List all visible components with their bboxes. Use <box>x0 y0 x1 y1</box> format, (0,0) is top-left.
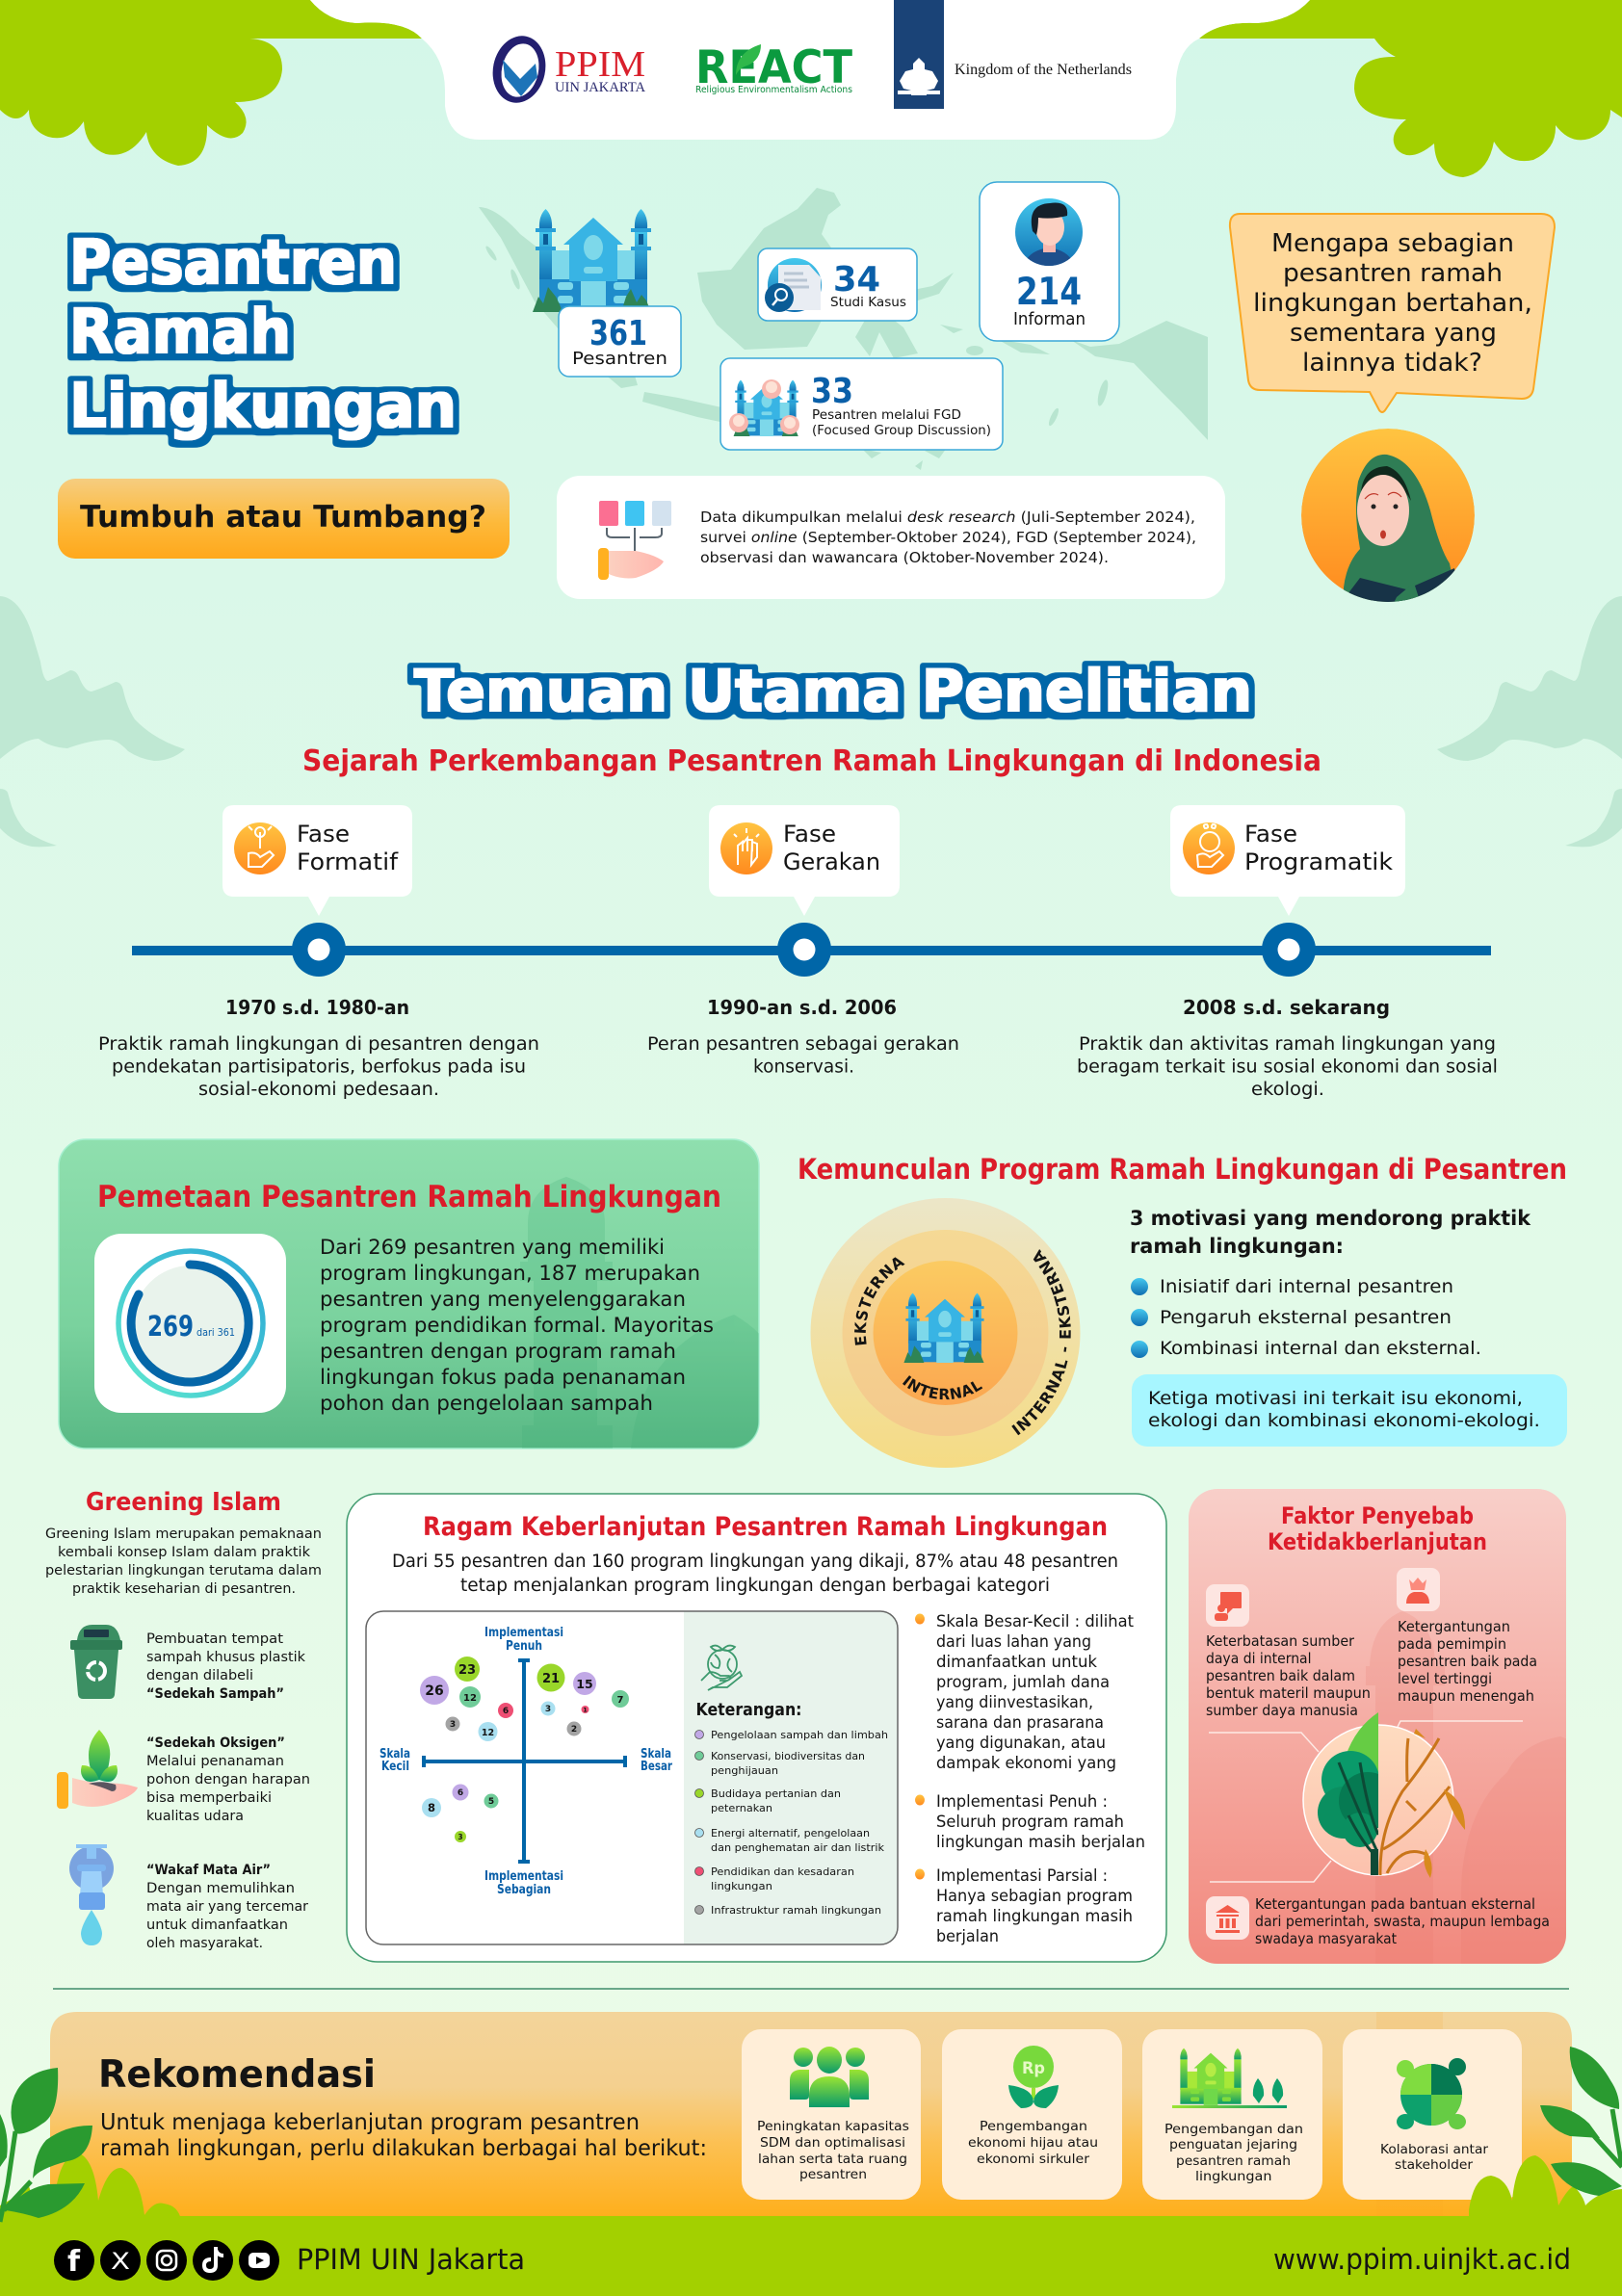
timeline phase 3: Praktik dan aktivitas ramah lingkungan yang <box>1079 1034 1496 1055</box>
scale definitions: yang diinvestasikan, <box>936 1693 1093 1711</box>
panel: Pemetaan Pesantren: program pendidikan formal. Mayoritas <box>320 1314 714 1337</box>
timeline phase 2: Peran pesantren sebagai gerakan <box>647 1034 959 1055</box>
icon: leader dependency <box>1397 1568 1440 1611</box>
concentric circles diagram: INTERNAL <box>903 1375 982 1400</box>
callout: speech bubble question: Mengapa sebagian <box>1271 229 1514 258</box>
panel: Greening Islam: pohon dengan harapan <box>146 1772 310 1787</box>
stat: 214 informan: 214 <box>1016 271 1082 314</box>
chart: quadrant bubble chart: 5 <box>488 1797 494 1807</box>
panel: Greening Islam: Greening Islam <box>86 1488 281 1517</box>
stat: 214 informan: Informan <box>1013 310 1086 329</box>
chart: quadrant bubble chart: 3 <box>450 1720 456 1730</box>
panel: Faktor Penyebab Ketidakberlanjutan: Faktor Penyebab <box>1281 1502 1474 1529</box>
panel: Pemetaan Pesantren: program lingkungan, 187 merupakan <box>320 1262 700 1285</box>
logo: PPIM UIN Jakarta: PPIM <box>555 44 645 85</box>
timeline phase 1: 1970 s.d. 1980-an <box>225 996 409 1019</box>
card: kapasitas SDM: SDM dan optimalisasi <box>760 2135 905 2151</box>
card: kapasitas SDM: pesantren <box>799 2167 867 2182</box>
panel: Greening Islam: “Sedekah Sampah” <box>146 1686 284 1702</box>
legend: peternakan <box>711 1803 772 1814</box>
panel: Faktor Penyebab Ketidakberlanjutan: pesantren baik pada <box>1398 1653 1537 1670</box>
panel: Faktor Penyebab Ketidakberlanjutan: maupun menengah <box>1398 1687 1534 1705</box>
card: jejaring pesantren: pesantren ramah <box>1176 2153 1291 2169</box>
stat: 34 studi kasus: 34 <box>833 260 880 300</box>
icon: external aid bank <box>1206 1896 1249 1940</box>
timeline phase 2 <box>647 805 959 1077</box>
chart: quadrant bubble chart: Besar <box>641 1760 672 1774</box>
timeline phase 2: konservasi. <box>753 1057 854 1077</box>
panel: Greening Islam: praktik keseharian di pesantren. <box>72 1581 296 1597</box>
motivation list <box>1131 1276 1481 1359</box>
scale definitions: Implementasi Penuh : <box>936 1792 1108 1811</box>
callout: three motivations <box>1132 1374 1567 1447</box>
progress ring tile <box>94 1234 286 1413</box>
chart: quadrant bubble chart: 7 <box>617 1695 624 1706</box>
callout: speech bubble question: sementara yang <box>1290 319 1497 348</box>
icon: hand with seedling <box>57 1730 138 1809</box>
footer band: PPIM UIN Jakarta <box>297 2243 525 2276</box>
timeline phase 3 <box>1077 805 1498 1100</box>
phase card <box>1170 805 1405 916</box>
section: Kemunculan Program: ramah lingkungan: <box>1130 1235 1344 1258</box>
panel: Greening Islam: Greening Islam merupakan pemaknaan <box>45 1526 322 1542</box>
progress ring tile: 269 <box>147 1310 194 1343</box>
stat: 33 pesantren FGD: Pesantren melalui FGD <box>812 408 961 423</box>
panel: Faktor Penyebab Ketidakberlanjutan: bentuk materil maupun <box>1206 1684 1371 1702</box>
heading: Temuan Utama Penelitian: Temuan Utama Penelitian <box>414 658 1252 725</box>
card: jejaring pesantren <box>1142 2029 1322 2200</box>
icon: people group <box>790 2047 869 2107</box>
panel: Greening Islam: “Sedekah Oksigen” <box>146 1735 285 1751</box>
chart: quadrant bubble chart: 12 <box>482 1728 494 1738</box>
icon: green mosque and trees <box>1172 2048 1287 2108</box>
plant leaves right <box>1540 2047 1622 2196</box>
title: Ramah <box>69 297 291 367</box>
chart: quadrant bubble chart: 2 <box>571 1725 577 1735</box>
tree foliage: top left <box>0 0 422 166</box>
chart: quadrant bubble chart: 15 <box>576 1677 593 1691</box>
section: Kemunculan Program <box>798 1153 1567 1468</box>
panel: Greening Islam: oleh masyarakat. <box>146 1936 263 1951</box>
scale definitions: dampak ekonomi yang <box>936 1754 1116 1772</box>
icon: rupiah flower <box>1008 2046 1059 2108</box>
chart: quadrant bubble chart: Implementasi <box>484 1869 563 1884</box>
logo: PPIM UIN Jakarta: UIN JAKARTA <box>555 80 645 95</box>
panel: Greening Islam: kualitas udara <box>146 1809 244 1824</box>
callout: speech bubble question: pesantren ramah <box>1283 259 1503 288</box>
header logo band <box>310 0 1310 140</box>
scale definitions <box>915 1612 1145 1945</box>
panel: Greening Islam: Melalui penanaman <box>146 1754 284 1769</box>
legend: Budidaya pertanian dan <box>711 1788 841 1800</box>
panel: Greening Islam: dengan dilabeli <box>146 1668 253 1683</box>
panel: Ragam Keberlanjutan: tetap menjalankan program lingkungan dengan berbagai kategori <box>460 1576 1050 1596</box>
logo: Kingdom of the Netherlands <box>894 0 1132 109</box>
icon: puzzle globe <box>1397 2058 1466 2129</box>
social icons: f <box>67 2245 81 2279</box>
icon: man avatar <box>1015 198 1083 266</box>
legend <box>695 1646 888 1917</box>
panel: Greening Islam: pelestarian lingkungan terutama dalam <box>45 1563 322 1578</box>
social icons <box>54 2240 279 2281</box>
panel: Faktor Penyebab Ketidakberlanjutan: swadaya masyarakat <box>1255 1930 1397 1947</box>
concentric circles diagram <box>811 1198 1081 1468</box>
stat: 33 pesantren FGD: 33 <box>811 372 853 411</box>
chart: quadrant bubble chart: Implementasi <box>484 1626 563 1640</box>
map of Indonesia <box>479 188 1208 470</box>
logo: Kingdom of the Netherlands: Kingdom of the Netherlands <box>955 62 1132 78</box>
timeline phase 3: 2008 s.d. sekarang <box>1183 996 1390 1019</box>
card: kapasitas SDM <box>742 2029 921 2200</box>
chart: quadrant bubble chart: Kecil <box>381 1760 409 1774</box>
scale definitions: Seluruh program ramah <box>936 1813 1124 1831</box>
stat: 34 studi kasus <box>758 248 917 321</box>
section: Kemunculan Program: 3 motivasi yang mendorong praktik <box>1130 1207 1531 1230</box>
panel: Greening Islam: sampah khusus plastik <box>146 1650 306 1665</box>
scale definitions: program, jumlah dana <box>936 1673 1110 1691</box>
timeline phase 1: pendekatan partisipatoris, berfokus pada isu <box>112 1057 526 1077</box>
chart: quadrant bubble chart: 21 <box>542 1672 560 1686</box>
stat: 33 pesantren FGD: (Focused Group Discussion) <box>812 424 991 438</box>
chart: quadrant bubble chart: 12 <box>463 1693 477 1704</box>
legend: Keterangan: <box>695 1700 801 1720</box>
panel: Ragam Keberlanjutan: Ragam Keberlanjutan Pesantren Ramah Lingkungan <box>423 1512 1108 1542</box>
phase card: Fase <box>297 821 350 848</box>
heading: Sejarah Perkembangan: Sejarah Perkembangan Pesantren Ramah Lingkungan di Indonesia <box>302 744 1321 778</box>
panel: Pemetaan Pesantren: lingkungan fokus pada penanaman <box>320 1366 686 1389</box>
panel: Rekomendasi: Rekomendasi <box>98 2053 376 2097</box>
panel: Ragam Keberlanjutan <box>347 1494 1166 1962</box>
panel: Faktor Penyebab Ketidakberlanjutan: Ketidakberlanjutan <box>1268 1528 1487 1555</box>
panel: Rekomendasi <box>50 2012 1572 2225</box>
panel: Greening Islam: untuk dimanfaatkan <box>146 1918 288 1933</box>
panel: Greening Islam: kembali konsep Islam dalam praktik <box>58 1545 311 1560</box>
title: Lingkungan <box>69 371 457 441</box>
progress ring tile: dari 361 <box>196 1326 235 1339</box>
panel: Greening Islam: bisa memperbaiki <box>146 1790 272 1806</box>
icon: rupiah flower: Rp <box>1022 2059 1045 2078</box>
panel: Greening Islam: Pembuatan tempat <box>146 1631 284 1647</box>
subtitle button: Tumbuh atau Tumbang? <box>80 500 486 535</box>
timeline phase 1 <box>98 805 539 1100</box>
stat: 33 pesantren FGD <box>720 358 1003 450</box>
decorative leaves left <box>0 596 185 847</box>
logo: REACT: Religious Environmentalism Actions <box>695 85 852 95</box>
chart: quadrant bubble chart: 1 <box>583 1707 588 1714</box>
panel: Faktor Penyebab Ketidakberlanjutan: pesantren baik dalam <box>1206 1667 1355 1684</box>
scale definitions: Hanya sebagian program <box>936 1887 1133 1905</box>
panel: Greening Islam: “Wakaf Mata Air” <box>146 1863 271 1878</box>
panel: Faktor Penyebab Ketidakberlanjutan <box>1189 1489 1580 1964</box>
scale definitions: Skala Besar-Kecil : dilihat <box>936 1612 1135 1631</box>
card: ekonomi hijau: ekonomi sirkuler <box>977 2152 1089 2167</box>
decorative leaves right <box>1437 596 1622 847</box>
social icons: X <box>111 2248 130 2275</box>
chart: quadrant bubble chart: 23 <box>458 1663 476 1678</box>
panel: Rekomendasi: ramah lingkungan, perlu dilakukan berbagai hal berikut: <box>100 2136 707 2161</box>
title: Pesantren <box>69 227 397 298</box>
legend: Konservasi, biodiversitas dan <box>711 1751 865 1762</box>
timeline phase 2: 1990-an s.d. 2006 <box>707 996 897 1019</box>
stat: 361 pesantren: 361 <box>589 314 647 353</box>
icon: data in hand <box>598 501 671 580</box>
panel: Greening Islam: Dengan memulihkan <box>146 1881 295 1896</box>
panel: Faktor Penyebab Ketidakberlanjutan: level tertinggi <box>1398 1670 1492 1687</box>
scale definitions: dari luas lahan yang <box>936 1632 1091 1651</box>
chart: quadrant bubble chart: Skala <box>379 1747 410 1761</box>
chart: quadrant bubble chart: Sebagian <box>497 1883 551 1897</box>
panel: data collection: survei online (September-Oktober 2024), FGD (September 2024), <box>700 529 1196 546</box>
chart: quadrant bubble chart: 6 <box>458 1788 463 1798</box>
footer band: www.ppim.uinjkt.ac.id <box>1273 2243 1571 2276</box>
stat: 214 informan <box>980 182 1119 341</box>
scale definitions: sarana dan prasarana <box>936 1713 1104 1732</box>
panel: data collection: observasi dan wawancara (Oktober-November 2024). <box>700 549 1109 566</box>
phase card: Gerakan <box>783 848 880 875</box>
card: kolaborasi: Kolaborasi antar <box>1380 2142 1488 2157</box>
footer bushes right <box>1469 2155 1622 2225</box>
motivation list: Pengaruh eksternal pesantren <box>1160 1307 1452 1328</box>
scale definitions: Implementasi Parsial : <box>936 1866 1108 1885</box>
logo: REACT: REACT <box>695 41 852 94</box>
legend: Energi alternatif, pengelolaan <box>711 1828 870 1839</box>
card: ekonomi hijau <box>942 2029 1122 2200</box>
panel: Rekomendasi: Untuk menjaga keberlanjutan program pesantren <box>100 2110 640 2135</box>
chart: quadrant bubble chart: 26 <box>425 1683 444 1699</box>
scale definitions: yang digunakan, atau <box>936 1734 1106 1752</box>
chart: quadrant bubble chart: 3 <box>458 1833 463 1841</box>
timeline line <box>132 946 1491 955</box>
phase card: Fase <box>1244 821 1297 848</box>
card: ekonomi hijau: ekonomi hijau atau <box>968 2135 1098 2151</box>
chart: quadrant bubble chart: 3 <box>545 1705 551 1714</box>
panel: data collection <box>557 476 1225 599</box>
card: kapasitas SDM: lahan serta tata ruang <box>758 2152 907 2167</box>
chart: quadrant bubble chart: Penuh <box>506 1639 542 1654</box>
legend: lingkungan <box>711 1881 772 1892</box>
panel: Faktor Penyebab Ketidakberlanjutan: Ketergantungan pada bantuan eksternal <box>1255 1895 1535 1913</box>
card: jejaring pesantren: Pengembangan dan <box>1164 2122 1303 2137</box>
callout: three motivations: ekologi dan kombinasi ekonomi-ekologi. <box>1148 1410 1540 1431</box>
panel: Pemetaan Pesantren: pesantren dengan program ramah <box>320 1340 676 1363</box>
timeline phase 3: beragam terkait isu sosial ekonomi dan sosial <box>1077 1057 1498 1077</box>
concentric circles diagram: INTERNAL - EKSTERNAL <box>1011 1249 1071 1435</box>
chart: quadrant bubble chart: 8 <box>428 1801 435 1814</box>
timeline phase 1: Praktik ramah lingkungan di pesantren dengan <box>98 1034 539 1055</box>
scale definitions: ramah lingkungan masih <box>936 1907 1133 1925</box>
callout: speech bubble question: lingkungan bertahan, <box>1253 289 1532 318</box>
motivation list: Kombinasi internal dan eksternal. <box>1160 1338 1481 1359</box>
icon: document magnifier <box>765 258 822 312</box>
panel: Faktor Penyebab Ketidakberlanjutan: dari pemerintah, swasta, maupun lembaga <box>1255 1913 1550 1930</box>
icon: recycling bin <box>70 1625 122 1699</box>
phase card <box>222 805 412 916</box>
legend: penghijauan <box>711 1765 778 1777</box>
timeline phase 1: sosial-ekonomi pedesaan. <box>198 1080 439 1100</box>
card: jejaring pesantren: penguatan jejaring <box>1169 2137 1297 2152</box>
panel: Faktor Penyebab Ketidakberlanjutan: sumber daya manusia <box>1206 1702 1358 1719</box>
logo: PPIM UIN Jakarta <box>486 31 645 108</box>
legend: Pengelolaan sampah dan limbah <box>711 1730 888 1741</box>
panel: Pemetaan Pesantren: Pemetaan Pesantren Ramah Lingkungan <box>97 1180 721 1214</box>
plant leaves left <box>0 2068 92 2222</box>
chart: quadrant bubble chart <box>366 1611 898 1944</box>
card: kolaborasi <box>1343 2029 1522 2200</box>
motivation list: Inisiatif dari internal pesantren <box>1160 1276 1453 1297</box>
title <box>69 227 457 441</box>
panel: Greening Islam <box>45 1488 322 1951</box>
callout: speech bubble question <box>1230 214 1555 412</box>
icon: mosque <box>533 209 651 312</box>
phase card: Programatik <box>1244 848 1393 875</box>
panel: Pemetaan Pesantren: Dari 269 pesantren yang memiliki <box>320 1236 665 1259</box>
stat: 361 pesantren <box>533 209 681 377</box>
panel: Pemetaan Pesantren: pohon dan pengelolaan sampah <box>320 1392 653 1415</box>
panel: Faktor Penyebab Ketidakberlanjutan: pada pemimpin <box>1398 1635 1506 1653</box>
icon: half green half dying tree <box>1209 1712 1523 1882</box>
phase card: Fase <box>783 821 836 848</box>
legend: Pendidikan dan kesadaran <box>711 1866 854 1878</box>
card: kolaborasi: stakeholder <box>1395 2157 1473 2173</box>
stat: 34 studi kasus: Studi Kasus <box>830 296 906 310</box>
chart: quadrant bubble chart: Skala <box>641 1747 671 1761</box>
callout: three motivations: Ketiga motivasi ini terkait isu ekonomi, <box>1148 1388 1523 1409</box>
legend: Infrastruktur ramah lingkungan <box>711 1905 881 1917</box>
chart: quadrant bubble chart: 6 <box>503 1707 509 1716</box>
icon: water tap <box>69 1845 114 1945</box>
card: jejaring pesantren: lingkungan <box>1195 2169 1271 2184</box>
panel: Greening Islam: mata air yang tercemar <box>146 1899 308 1915</box>
icon: limited resources <box>1206 1584 1249 1627</box>
callout: speech bubble question: lainnya tidak? <box>1302 349 1482 378</box>
legend: dan penghematan air dan listrik <box>711 1842 885 1854</box>
subtitle button <box>58 479 510 559</box>
scale definitions: berjalan <box>936 1927 999 1945</box>
phase card: Formatif <box>297 848 399 875</box>
panel: data collection: Data dikumpulkan melalui desk research (Juli-September 2024), <box>700 509 1195 526</box>
stat: 361 pesantren: Pesantren <box>572 350 667 369</box>
timeline phase 3: ekologi. <box>1251 1080 1324 1100</box>
footer bushes left <box>0 2152 181 2225</box>
footer band <box>0 2216 1622 2296</box>
card: kapasitas SDM: Peningkatan kapasitas <box>757 2119 909 2134</box>
panel: Faktor Penyebab Ketidakberlanjutan: Ketergantungan <box>1398 1618 1510 1635</box>
icon: globe in hand <box>701 1646 742 1690</box>
panel: Pemetaan Pesantren: pesantren yang menyelenggarakan <box>320 1288 686 1311</box>
tree foliage: top right <box>1199 0 1622 177</box>
phase card <box>709 805 900 916</box>
icon: mosque with people <box>729 379 799 436</box>
panel: Faktor Penyebab Ketidakberlanjutan: daya di internal <box>1206 1650 1312 1667</box>
panel: Pemetaan Pesantren <box>59 1139 771 1448</box>
scale definitions: lingkungan masih berjalan <box>936 1833 1145 1851</box>
panel: Ragam Keberlanjutan: Dari 55 pesantren dan 160 program lingkungan yang dikaji, 87% atau 48 pesantren <box>392 1552 1118 1572</box>
concentric circles diagram: EKSTERNAL <box>854 1257 905 1345</box>
card: ekonomi hijau: Pengembangan <box>980 2119 1087 2134</box>
panel: Faktor Penyebab Ketidakberlanjutan: Keterbatasan sumber <box>1206 1632 1355 1650</box>
icon: woman avatar <box>1301 429 1475 616</box>
scale definitions: dimanfaatkan untuk <box>936 1653 1097 1671</box>
